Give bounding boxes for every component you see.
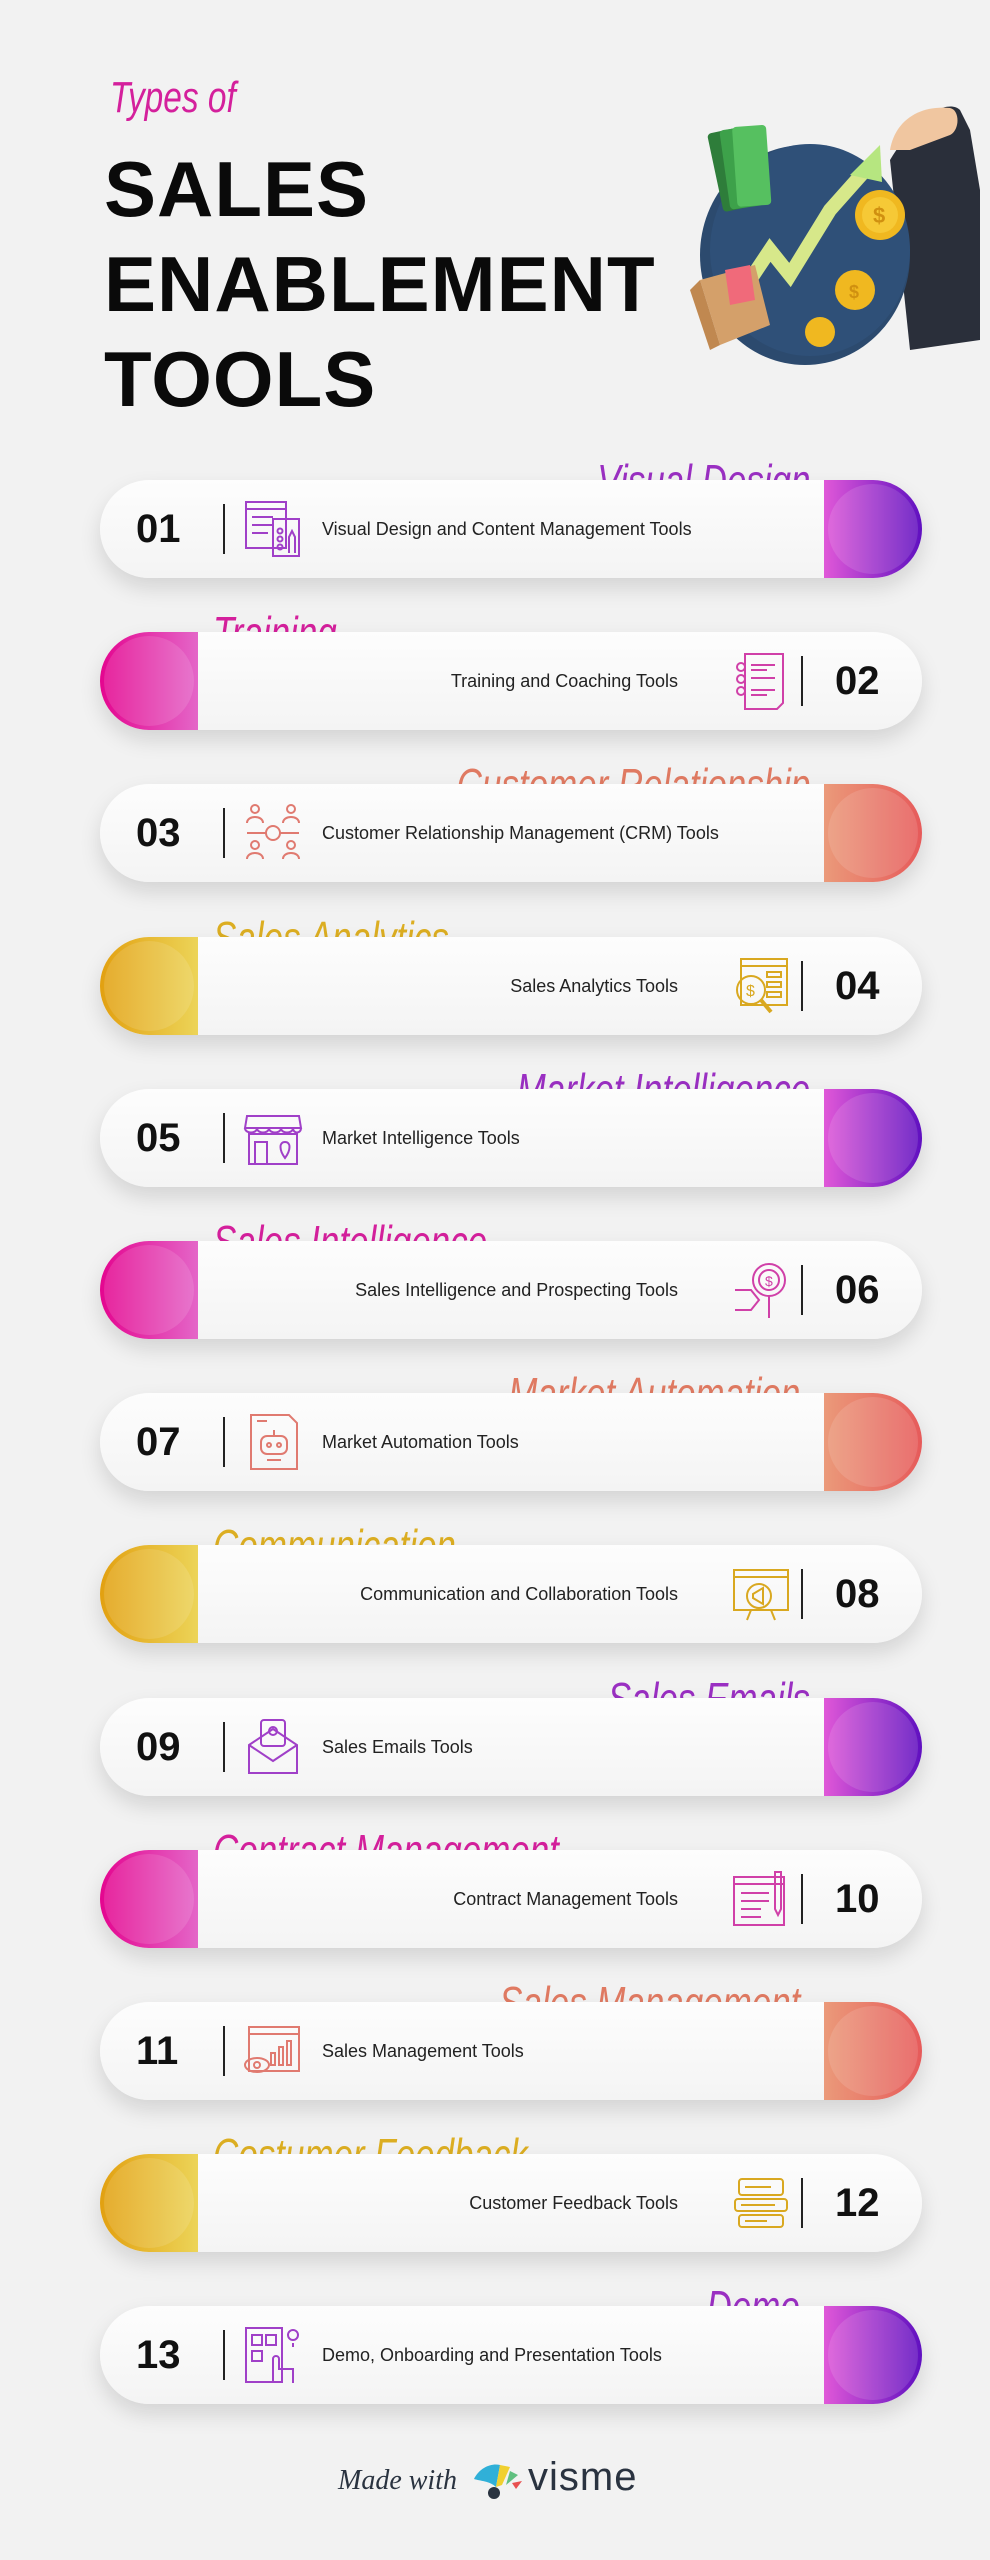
row 03: [94, 759, 928, 898]
pill: [100, 1545, 922, 1643]
script label: Sales Management: [499, 1977, 800, 2029]
icon: feedback form: [734, 2178, 788, 2228]
row 02: [94, 607, 928, 746]
row 04: [94, 912, 928, 1052]
script label: Visual Design: [597, 455, 810, 507]
pill: [100, 1089, 922, 1187]
icon: robot document: [250, 1414, 298, 1470]
pill: [100, 632, 922, 730]
pill: Sales Intelligence and Prospecting Tools: [355, 1280, 678, 1300]
footer: made with visme: Made with: [338, 2465, 457, 2496]
footer: made with visme: visme: [528, 2455, 637, 2499]
row 11: [94, 1977, 928, 2116]
icon: contract: [733, 1871, 785, 1926]
illustration: sales growth: $: [873, 203, 885, 228]
script label: Market Automation: [508, 1368, 800, 1420]
pill: [100, 2306, 922, 2404]
pill: [100, 937, 922, 1035]
pill: Market Automation Tools: [322, 1432, 519, 1452]
icon: prospecting: $: [765, 1273, 773, 1289]
pill: Visual Design and Content Management Tools: [322, 519, 692, 539]
icon: people network: [246, 804, 300, 859]
icon: megaphone: [733, 1569, 789, 1620]
title: TOOLS: [104, 335, 376, 423]
pill: Contract Management Tools: [453, 1889, 678, 1909]
pill: 08: [835, 1572, 880, 1616]
icon: visme logo: [474, 2464, 522, 2499]
icon: analytics search: $: [746, 983, 755, 1000]
pill: [100, 2154, 922, 2252]
pill: 05: [136, 1116, 180, 1160]
icon: analytics search: [736, 958, 788, 1014]
illustration: sales growth: $: [849, 282, 859, 302]
pill: Customer Feedback Tools: [469, 2193, 678, 2213]
pill: Communication and Collaboration Tools: [360, 1584, 678, 1604]
row 10: [94, 1825, 928, 1964]
pill: 02: [835, 659, 880, 703]
row 06: [94, 1216, 928, 1356]
icon: email: [248, 1719, 298, 1774]
pill: [100, 784, 922, 882]
script label: Sales Analytics: [213, 912, 449, 964]
row 12: [94, 2129, 928, 2268]
pill: [100, 2002, 922, 2100]
pill: Market Intelligence Tools: [322, 1128, 520, 1148]
icon: dashboard: [244, 2026, 300, 2073]
row 08: [94, 1520, 928, 1660]
script label: Demo: [707, 2281, 800, 2333]
icon: checklist: [736, 653, 784, 710]
script label: Costumer Feedback: [213, 2129, 528, 2181]
pill: [100, 1850, 922, 1948]
pill: 12: [835, 2181, 880, 2225]
icon: store: [244, 1115, 302, 1165]
pill: 06: [835, 1268, 880, 1312]
pill: Demo, Onboarding and Presentation Tools: [322, 2345, 662, 2365]
row 09: [94, 1673, 928, 1812]
script label: Customer Relationship: [456, 759, 810, 811]
pill: Sales Emails Tools: [322, 1737, 473, 1757]
title: SALES: [104, 145, 369, 233]
pill: [100, 1698, 922, 1796]
pill: 10: [835, 1877, 880, 1921]
footer: made with visme: [338, 2455, 637, 2499]
row 01: [94, 455, 928, 594]
pill: 09: [136, 1725, 180, 1769]
title: ENABLEMENT: [104, 240, 656, 328]
pill: Training and Coaching Tools: [451, 671, 678, 691]
pill: [100, 1241, 922, 1339]
pill: 03: [136, 811, 180, 855]
row 07: [94, 1368, 928, 1508]
script label: Sales Intelligence: [213, 1216, 487, 1268]
pill: 13: [136, 2333, 180, 2377]
icon: layout design: [245, 501, 300, 557]
icon: prospecting: [735, 1263, 786, 1318]
pill: 04: [835, 964, 880, 1008]
pill: 11: [136, 2029, 178, 2073]
subtitle: Types of: Types of: [110, 73, 236, 122]
script label: Training: [213, 607, 337, 659]
row 05: [94, 1064, 928, 1204]
icon: presentation: [245, 2327, 299, 2383]
pill: [100, 1393, 922, 1491]
script label: Contract Management: [213, 1825, 559, 1877]
illustration: sales growth: [690, 106, 980, 365]
script label: Market Intelligence: [517, 1064, 810, 1116]
pill: Customer Relationship Management (CRM) Tools: [322, 823, 719, 843]
pill: Sales Analytics Tools: [510, 976, 678, 996]
script label: Communication: [213, 1520, 456, 1572]
pill: 07: [136, 1420, 180, 1464]
title: [104, 145, 656, 423]
pill: [100, 480, 922, 578]
pill: Sales Management Tools: [322, 2041, 524, 2061]
pill: 01: [136, 507, 180, 551]
script label: Sales Emails: [608, 1673, 810, 1725]
row 13: [94, 2281, 928, 2420]
